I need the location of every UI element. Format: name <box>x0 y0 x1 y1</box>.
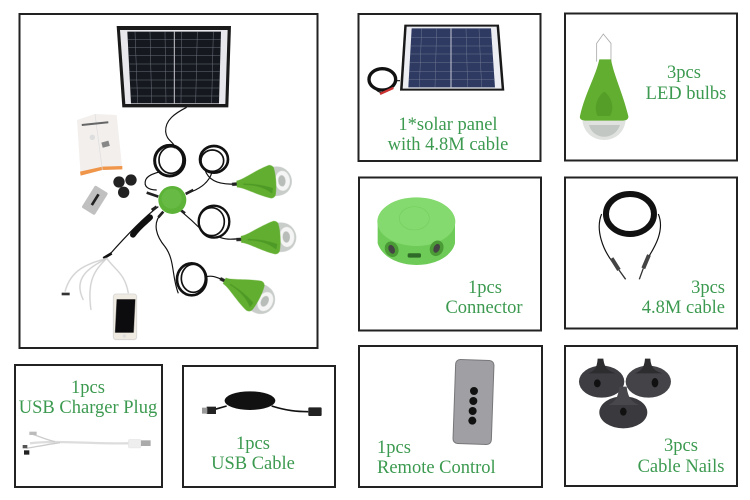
white charger cable <box>62 258 128 310</box>
caption: USB Charger Plug <box>19 398 157 418</box>
central connector <box>158 186 186 214</box>
cable coil icon <box>599 194 661 279</box>
caption <box>211 434 295 474</box>
caption <box>642 278 725 318</box>
caption: with 4.8M cable <box>388 135 508 155</box>
panel: solar panel with cable <box>358 14 540 161</box>
caption: Cable Nails <box>638 457 724 477</box>
cable nails small <box>113 174 137 198</box>
panel: cable nails <box>565 346 737 486</box>
caption <box>445 278 523 318</box>
remote icon <box>453 359 494 445</box>
connector icon <box>377 197 455 265</box>
caption <box>646 63 726 104</box>
caption <box>388 115 508 155</box>
caption: 1*solar panel <box>398 115 498 135</box>
caption <box>377 438 496 478</box>
bulb 1 <box>231 163 293 201</box>
caption: Remote Control <box>377 458 496 478</box>
smartphone <box>113 294 137 340</box>
caption: 3pcs <box>691 278 725 298</box>
cables and coils <box>103 107 242 295</box>
cable nails icon <box>579 359 671 428</box>
caption: 1pcs <box>236 434 270 454</box>
LED bulb icon <box>580 34 628 140</box>
caption <box>638 436 724 477</box>
remote small <box>81 185 108 215</box>
instruction manual <box>77 114 122 176</box>
caption: 3pcs <box>664 436 698 456</box>
caption: Connector <box>445 298 523 318</box>
panel: connector <box>359 178 541 330</box>
caption: 1pcs <box>377 438 411 458</box>
charger cable icon <box>23 432 151 455</box>
panel: remote control <box>359 346 542 487</box>
solar panel <box>117 26 231 107</box>
panel: LED bulbs <box>565 14 737 160</box>
panel: full kit overview <box>20 14 318 348</box>
caption: 3pcs <box>667 63 701 83</box>
caption <box>19 378 157 418</box>
panel: 4.8M cable <box>565 178 737 328</box>
caption: LED bulbs <box>646 84 726 104</box>
solar panel icon <box>400 25 504 91</box>
coiled cable <box>369 69 400 94</box>
panel: USB charger plug <box>15 365 162 487</box>
caption: 1pcs <box>71 378 105 398</box>
caption: USB Cable <box>211 454 295 474</box>
bulb 3 <box>213 264 281 321</box>
panel: USB cable <box>183 366 335 487</box>
USB cable icon <box>202 391 322 416</box>
bulb 2 <box>235 220 297 256</box>
caption: 1pcs <box>468 278 502 298</box>
caption: 4.8M cable <box>642 298 725 318</box>
